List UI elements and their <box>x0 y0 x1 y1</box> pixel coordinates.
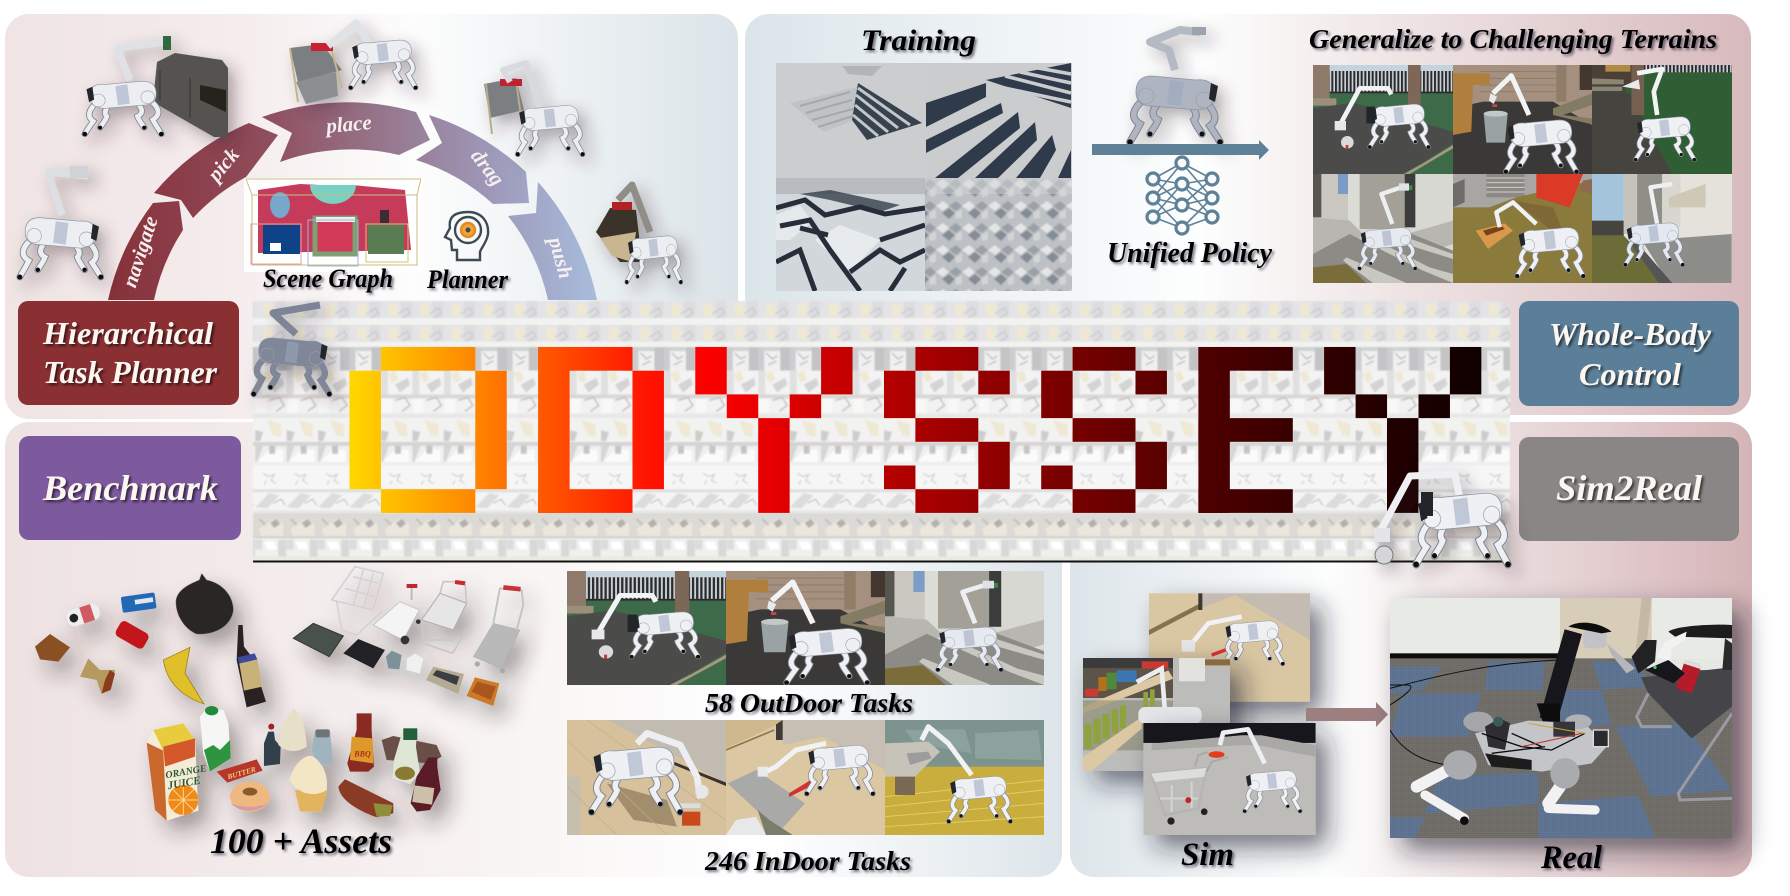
arc segment: drag <box>416 115 529 204</box>
center band: odyssey title <box>251 301 1511 567</box>
photo: building corner <box>1592 174 1732 283</box>
arrow: training to terrains <box>1092 140 1269 160</box>
panel: sim2real <box>1070 422 1752 877</box>
arc segment: navigate: navigate <box>117 213 163 290</box>
arc segment: pick <box>154 123 278 218</box>
label box: hierarchical task planner: Hierarchical <box>42 315 213 351</box>
label: scene graph: Scene Graph <box>263 264 393 293</box>
sim photo: wooden floor <box>1149 593 1310 702</box>
photo: robot on grass <box>1592 65 1732 174</box>
carpet floor <box>1390 658 1732 838</box>
photo: bucket task <box>726 571 885 685</box>
label box: hierarchical task planner: Task Planner <box>43 354 218 390</box>
photo: steps task <box>885 571 1044 685</box>
arc arrows: action sequence <box>108 102 597 300</box>
photo: bucket on deck <box>1453 65 1592 174</box>
label box: benchmark: Benchmark <box>42 468 218 508</box>
scene graph point cloud <box>244 178 423 272</box>
panel background <box>745 14 1751 415</box>
arc segment: push <box>508 182 597 300</box>
arc segment: place <box>262 102 430 162</box>
quadruped legs <box>1417 770 1595 818</box>
panel: whole-body control <box>745 14 1751 415</box>
quadruped body <box>1443 712 1608 789</box>
label: sim: Sim <box>1181 837 1234 873</box>
robot: unified policy <box>1127 27 1223 145</box>
terrain: pyramid stairs <box>776 63 925 178</box>
challenging terrains photo grid <box>1313 65 1732 283</box>
real robot photo <box>1390 598 1732 838</box>
robot with cabinet: pick <box>82 36 228 137</box>
terrain: blocks <box>776 178 925 291</box>
letter E <box>1198 347 1293 513</box>
sim photo: store shelves <box>1083 658 1230 771</box>
assets: carts and baskets <box>293 567 523 706</box>
outdoor tasks photo row <box>567 571 1044 685</box>
assets: food and groceries: BBQ <box>353 750 371 759</box>
label: unified policy: Unified Policy <box>1107 237 1272 269</box>
assets: food and groceries <box>147 706 442 821</box>
letter S <box>884 347 1010 513</box>
chair <box>1637 625 1732 800</box>
asset collection <box>35 567 523 821</box>
pixel wordmark ODYSSEY <box>350 347 1481 513</box>
arc segment: navigate <box>108 201 183 300</box>
sim photo: robot with shopping cart <box>1143 723 1316 835</box>
letter S <box>1041 347 1167 513</box>
label box: whole-body control: Control <box>1579 356 1681 392</box>
letter D <box>538 347 664 513</box>
photo: outdoor fence <box>1313 65 1453 174</box>
panel background <box>5 14 738 419</box>
robot with cart: place <box>290 23 418 104</box>
panel background <box>1070 422 1752 877</box>
label box: sim2real: Sim2Real <box>1556 468 1702 508</box>
arrow: sim to real <box>1306 702 1388 727</box>
assets: food and groceries: BUTTER <box>225 765 257 782</box>
robot: white quadruped at right of wordmark <box>1374 474 1511 567</box>
heading: training: Training <box>861 24 976 57</box>
label box: benchmark <box>19 436 241 540</box>
arm and gripper <box>1537 623 1687 728</box>
tiled background image strip <box>253 301 1510 562</box>
letter O <box>350 347 507 513</box>
photo: concrete steps <box>1313 174 1453 283</box>
label: real: Real <box>1540 840 1603 876</box>
indoor tasks photo row <box>567 720 1044 835</box>
label: 246 indoor tasks: 246 InDoor Tasks <box>704 846 911 876</box>
photo: wooden crate on grass <box>1453 174 1592 283</box>
arc segment: push: push <box>543 232 578 281</box>
label: 58 outdoor tasks: 58 OutDoor Tasks <box>705 688 913 718</box>
panel background <box>5 422 1062 877</box>
photo: outdoor fence task <box>567 571 726 685</box>
assets: food and groceries: ORANGE <box>165 763 208 781</box>
robot with cart: drag <box>484 63 585 156</box>
photo: picking box on floor <box>567 720 726 835</box>
assets: food and groceries: JUICE <box>166 775 202 792</box>
icon: planner head with target <box>445 212 488 260</box>
robot: grey quadruped at left of wordmark <box>251 305 332 396</box>
heading: generalize to challenging terrains: Generalize to Challenging Terrains <box>1309 24 1717 54</box>
simulation photo stack <box>1083 593 1316 835</box>
panel: benchmark <box>5 422 1062 877</box>
letter Y <box>695 347 853 513</box>
robot with cart: push <box>596 185 682 284</box>
arc segment: drag: drag <box>466 144 509 190</box>
label: 100+ assets: 100 + Assets <box>210 821 392 861</box>
arc segment: place: place <box>323 110 373 138</box>
robot: navigate <box>17 166 103 280</box>
icon: neural network <box>1147 157 1218 234</box>
letter Y <box>1324 347 1481 513</box>
terrain: rough mosaic <box>925 178 1072 291</box>
photo: red cylinder on tray <box>726 720 885 835</box>
cable <box>1390 660 1558 765</box>
terrain: large stairs <box>925 63 1072 178</box>
photo: sofa room <box>885 720 1044 835</box>
wall and door <box>1390 598 1732 675</box>
label box: sim2real <box>1519 437 1739 541</box>
arc segment: pick: pick <box>201 142 244 187</box>
label box: whole-body control <box>1519 301 1739 406</box>
label box: whole-body control: Whole-Body <box>1549 316 1712 352</box>
panel: hierarchical task planner <box>5 14 738 419</box>
training terrain grid <box>776 63 1075 294</box>
red can <box>1676 660 1702 694</box>
label box: hierarchical task planner <box>18 301 239 405</box>
label: planner: Planner <box>426 265 509 294</box>
assets: waste objects <box>35 573 266 707</box>
